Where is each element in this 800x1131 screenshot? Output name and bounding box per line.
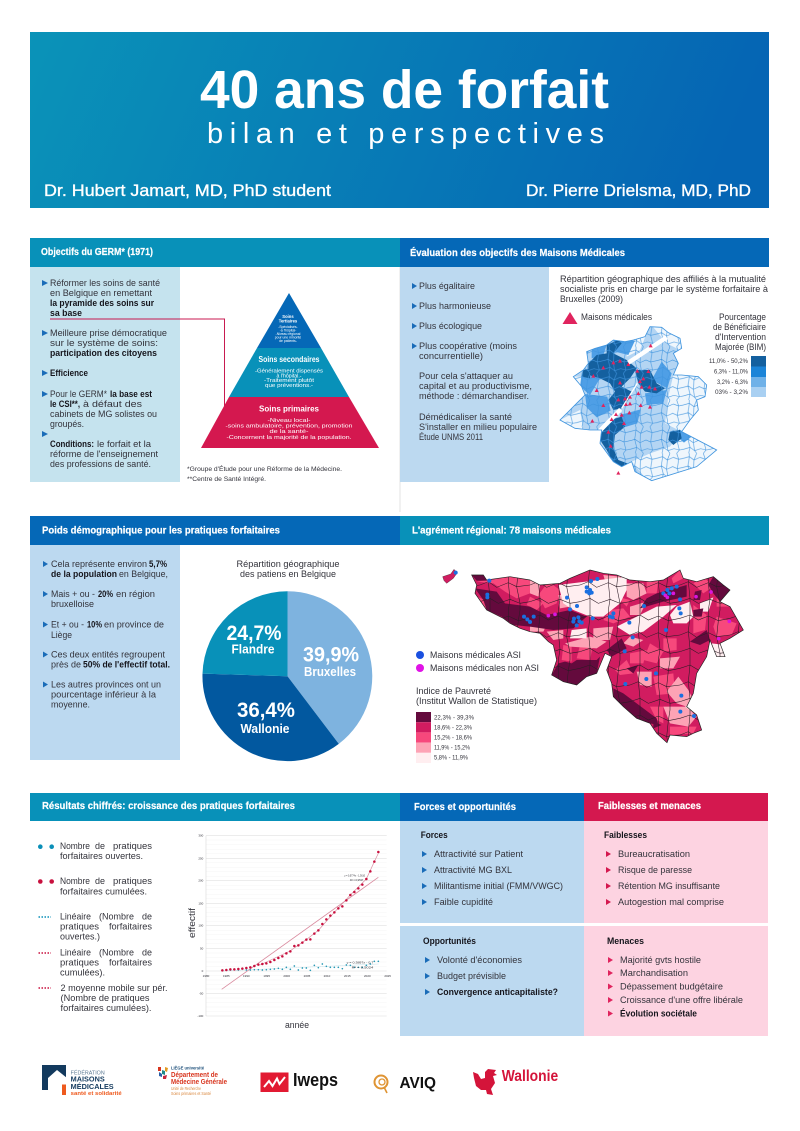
logo: Département de Médecine Générale: Médecine Générale <box>171 1079 227 1086</box>
heading: résultats <box>30 793 400 821</box>
évaluation text block: S'installer en milieu populaire <box>419 422 537 432</box>
legend: BIM percentage: Pourcentage <box>719 312 766 322</box>
legend: poverty index: 18,6% - 22,3% <box>434 724 472 732</box>
chart legend: pratiques <box>60 922 100 932</box>
panel: agrément régional <box>400 516 769 763</box>
pyramid of care: Tertiaires <box>279 318 298 324</box>
logo: Département de Médecine Générale: LIÈGE université <box>171 1064 204 1071</box>
legend: poverty index: (Institut Wallon de Statistique) <box>416 696 537 706</box>
objectifs text block: Efficience <box>50 368 88 378</box>
footnotes <box>187 464 342 483</box>
démographie text block: pourcentage inférieur à la <box>51 690 156 700</box>
block: faiblesses: Rétention MG insuffisante <box>618 881 720 891</box>
pie chart <box>202 591 372 761</box>
démographie text block: 50% de l'effectif total. <box>83 660 170 670</box>
series: open practices <box>230 961 378 970</box>
chart legend: forfaitaires <box>109 958 152 968</box>
chart legend: forfaitaires <box>109 922 152 932</box>
chart legend: ouvertes.) <box>60 932 100 942</box>
objectifs text block: la base est <box>110 389 152 399</box>
heading: évaluation <box>400 238 769 267</box>
line chart: growth: 1995 <box>263 974 270 978</box>
Brussels map caption: Répartition géographique des affiliés à la mutualité <box>560 274 766 284</box>
objectifs text block: la pyramide des soins sur <box>50 298 154 308</box>
évaluation text block: Pour cela s'attaquer au <box>419 371 513 381</box>
démographie text block: Mais + ou - <box>51 589 95 599</box>
objectifs text block: groupés. <box>50 419 84 429</box>
logo: Département de Médecine Générale: Département de <box>171 1072 218 1079</box>
Brussels map caption: socialiste pris en charge par le système forfaitaire à <box>560 284 768 294</box>
chart legend: pratiques <box>113 841 153 851</box>
logo: Wallonie <box>473 1068 558 1095</box>
panel: forces et opportunités <box>400 793 584 1036</box>
pyramid of care: -soins ambulatoire, prévention, promotion <box>226 424 352 430</box>
pie chart: 36,4% <box>237 699 295 722</box>
démographie text block: Les autres provinces ont un <box>51 680 161 690</box>
heading: poids démographique <box>30 516 400 545</box>
pyramid of care: -Concernent la majorité de la population. <box>226 435 352 441</box>
legend: non ASI: Maisons médicales non ASI <box>430 663 539 673</box>
header banner <box>30 32 769 208</box>
pyramid of care: -Généralement dispensés <box>255 368 324 374</box>
pyramid of care: -Niveau local- <box>268 418 311 424</box>
démographie text block: en Belgique, <box>119 569 168 579</box>
pyramid of care <box>201 293 379 448</box>
panel: évaluation des objectifs <box>400 238 769 487</box>
chart legend: de <box>142 948 152 958</box>
legend: poverty index <box>416 686 537 763</box>
objectifs text block: le forfait et la <box>97 439 151 449</box>
démographie text block: Ces deux entités regroupent <box>51 650 165 660</box>
block: menaces <box>584 926 768 1036</box>
map: Wallonia poverty index <box>443 560 750 747</box>
line chart: growth: 200 <box>198 879 204 883</box>
legend: BIM percentage: 3,2% - 6,3% <box>717 379 748 386</box>
block: faiblesses: Faiblesses <box>604 830 647 840</box>
legend: maisons médicales <box>562 312 652 324</box>
logo: Fédération Maisons Médicales: santé et solidarité <box>71 1091 122 1097</box>
legend: poverty index: 22,3% - 39,3% <box>434 714 474 722</box>
line chart: growth: y = 0,3897x - 0,7 <box>347 961 374 965</box>
block: opportunités <box>400 926 584 1036</box>
legend: ASI: Maisons médicales ASI <box>430 650 521 660</box>
objectifs text block: à défaut des <box>83 399 143 409</box>
block: forces: Attractivité MG BXL <box>434 865 512 875</box>
démographie text block: en région <box>116 589 155 599</box>
objectifs text block: cabinets de MG solistes ou <box>50 409 157 419</box>
chart legend: cumulées). <box>60 968 105 978</box>
évaluation text block <box>400 267 549 482</box>
line chart: growth: 2015 <box>344 974 351 978</box>
pyramid of care: de la santé- <box>270 429 309 435</box>
heading: forces et opportunités <box>400 793 584 821</box>
objectifs text block: le CSI**, <box>50 399 80 409</box>
logo: Fédération Maisons Médicales: FÉDÉRATION <box>71 1070 105 1076</box>
line chart: growth: 2005 <box>304 974 311 978</box>
pyramid of care: pour une minorité <box>275 336 301 340</box>
logo: Fédération Maisons Médicales <box>42 1065 122 1097</box>
évaluation text block: méthode : démarchandiser. <box>419 391 529 401</box>
block: opportunités: Convergence anticapitaliste? <box>437 987 558 997</box>
legend: BIM percentage: 6,3% - 11,0% <box>714 368 748 376</box>
pie chart title: Répartition géographique <box>236 559 340 569</box>
block: opportunités: Opportunités <box>423 936 476 946</box>
legend: BIM percentage: de Bénéficiaire <box>713 322 766 332</box>
pyramid of care: Soins <box>282 314 294 319</box>
heading: agrément: L'agrément régional: 78 maisons médicales <box>412 526 611 536</box>
line chart: growth: 250 <box>198 856 204 860</box>
logo: AVIQ: AVIQ <box>400 1075 436 1092</box>
objectifs text block: réforme de l'enseignement <box>50 449 159 459</box>
chart legend: de <box>95 876 105 886</box>
logo: Fédération Maisons Médicales: MAISONS <box>71 1076 105 1084</box>
chart legend: Linéaire <box>60 948 91 958</box>
block: faiblesses: Bureaucratisation <box>618 849 690 859</box>
démographie text block: Liège <box>51 630 72 640</box>
logo: Fédération Maisons Médicales: MÉDICALES <box>71 1082 114 1091</box>
pyramid of care: que préventions.- <box>265 383 313 389</box>
démographie text block: 20% <box>98 589 113 599</box>
pyramid of care: -à l'hôpital- <box>280 328 296 332</box>
objectifs text block: participation des citoyens <box>50 348 157 358</box>
block: menaces: Évolution sociétale <box>620 1008 697 1018</box>
block: faiblesses: Risque de paresse <box>618 865 692 875</box>
évaluation text block: Plus égalitaire <box>419 281 475 291</box>
chart legend: pratiques <box>113 876 153 886</box>
heading: faiblesses et menaces <box>584 793 768 821</box>
évaluation text block: Démédicaliser la santé <box>419 412 512 422</box>
évaluation text block: Étude UNMS 2011 <box>419 432 483 442</box>
objectifs text block: Pour le GERM* <box>50 389 107 399</box>
pyramid of care: -Niveau régional <box>276 332 301 336</box>
Brussels map caption: Bruxelles (2009) <box>560 294 623 304</box>
démographie text block: près de <box>51 660 81 670</box>
heading: agrément <box>400 516 769 545</box>
panel: faiblesses et menaces <box>584 793 768 1036</box>
footnotes: *Groupe d'Étude pour une Réforme de la Médecine. <box>187 464 342 473</box>
chart legend: Linéaire <box>60 912 91 922</box>
line chart: growth: 100 <box>198 924 204 928</box>
block: forces <box>400 821 584 923</box>
démographie text block: de la population <box>51 569 117 579</box>
line chart: growth: R² = 0,5024 <box>352 965 374 969</box>
author right: Dr. Pierre Drielsma, MD, PhD <box>526 181 751 200</box>
heading: évaluation: Évaluation des objectifs des Maisons Médicales <box>410 246 625 259</box>
legend: poverty index: 15,2% - 18,6% <box>434 734 472 742</box>
évaluation text block: concurrentielle) <box>419 351 483 361</box>
Brussels map caption <box>560 274 768 304</box>
démographie text block: 5,7% <box>149 559 167 569</box>
line chart: growth: 0 <box>202 969 204 973</box>
legend: BIM percentage: 11,0% - 50,2% <box>709 358 748 365</box>
chart legend: pratiques <box>60 958 100 968</box>
line chart: growth: 1985 <box>223 974 230 978</box>
block: opportunités: Budget prévisible <box>437 971 506 981</box>
chart legend: (Nombre <box>99 948 134 958</box>
line chart: growth: 50 <box>200 946 204 950</box>
block: menaces: Marchandisation <box>620 968 688 978</box>
heading: objectifs <box>30 238 400 267</box>
pyramid of care: -Spécialisés- <box>278 325 298 329</box>
démographie text block: moyenne. <box>51 700 90 710</box>
démographie text block <box>30 545 180 760</box>
trend lines <box>222 877 378 989</box>
legend: poverty index: 5,8% - 11,9% <box>434 754 468 762</box>
chart legend: Nombre <box>60 876 90 886</box>
line chart: growth: 1980 <box>203 974 210 978</box>
objectifs text block: en Belgique en remettant <box>50 288 152 298</box>
chart legend: forfaitaires cumulées). <box>60 1003 152 1013</box>
panel: poids démographique <box>30 516 400 761</box>
heading: objectifs: Objectifs du GERM* (1971) <box>41 247 153 258</box>
legend: BIM percentage: Majorée (BIM) <box>715 342 766 352</box>
line chart: growth: 2025 <box>384 974 391 978</box>
author left: Dr. Hubert Jamart, MD, PhD student <box>44 181 331 200</box>
démographie text block: en province de <box>104 620 164 630</box>
chart legend: Nombre <box>60 841 90 851</box>
legend: BIM percentage: d'Intervention <box>715 332 766 342</box>
legend: BIM percentage: 03% - 3,2% <box>715 389 748 396</box>
objectifs text block: Conditions: <box>50 439 94 449</box>
map: Brussels <box>559 326 718 482</box>
heading: forces et opportunités: Forces et opportunités <box>414 802 516 813</box>
axis title: année: année <box>285 1020 309 1030</box>
chart legend: de <box>95 841 105 851</box>
pie chart title <box>236 559 340 579</box>
chart legend: (Nombre de pratiques <box>60 993 150 1003</box>
line chart: growth <box>197 834 391 1018</box>
chart legend: (Nombre <box>99 912 134 922</box>
évaluation text block: Plus coopérative (moins <box>419 341 518 351</box>
block: faiblesses: Autogestion mal comprise <box>618 897 724 907</box>
évaluation text block: Plus écologique <box>419 321 482 331</box>
objectifs text block: des professions de santé. <box>50 459 151 469</box>
chart legend: forfaitaires ouvertes. <box>60 851 143 861</box>
block: forces: Attractivité sur Patient <box>434 849 523 859</box>
pyramid of care: de patients- <box>279 339 297 343</box>
series: cumulative practices <box>222 852 378 970</box>
line chart: growth: -50 <box>199 991 204 995</box>
logo: Département de Médecine Générale <box>158 1064 227 1096</box>
line chart: growth: y = 0,5774x - 1,3610 <box>344 874 365 878</box>
pie chart: 24,7% <box>226 622 282 645</box>
pie chart: Wallonie <box>240 721 290 736</box>
logo: Département de Médecine Générale: Unité de Recherche <box>171 1086 201 1091</box>
block: menaces: Menaces <box>607 936 644 946</box>
panel: résultats chiffrés <box>30 793 400 1030</box>
objectifs text block: Meilleure prise démocratique <box>50 328 167 338</box>
logo: Wallonie: Wallonie <box>502 1068 558 1085</box>
pyramid of care: -Traitement plutôt <box>264 378 315 384</box>
block: forces: Forces <box>421 830 448 840</box>
objectifs text block: sa base <box>50 308 82 318</box>
chart legend: forfaitaires cumulées. <box>60 886 147 896</box>
pie chart: Flandre <box>232 642 274 657</box>
logo: Département de Médecine Générale: Soins primaires et Santé <box>171 1091 211 1096</box>
démographie text block: bruxelloise <box>51 599 94 609</box>
objectifs text block: Réformer les soins de santé <box>50 278 160 288</box>
block: menaces: Dépassement budgétaire <box>620 982 723 992</box>
logo: AVIQ <box>374 1075 436 1093</box>
pyramid of care: à l'hôpital.- <box>276 374 302 380</box>
line chart: growth: 2010 <box>324 974 331 978</box>
line chart: growth: 150 <box>198 901 204 905</box>
logo: Iweps <box>260 1070 338 1092</box>
évaluation text block: capital et au productivisme, <box>419 381 532 391</box>
line chart: growth: 1990 <box>243 974 250 978</box>
pie chart title: des patiens en Belgique <box>240 569 336 579</box>
line chart: growth: 2020 <box>364 974 371 978</box>
block: menaces: Majorité gvts hostile <box>620 955 701 965</box>
title: 40 ans de forfait <box>200 60 609 120</box>
legend: poverty index: 11,9% - 15,2% <box>434 744 470 752</box>
chart legend: de <box>142 912 152 922</box>
pyramid of care: Soins primaires <box>259 404 320 414</box>
pie chart: Bruxelles <box>304 664 356 679</box>
logo: Iweps: Iweps <box>293 1070 338 1090</box>
objectifs text block <box>30 267 180 482</box>
block: menaces: Croissance d'une offre libérale <box>620 995 743 1005</box>
panel: objectifs du GERM <box>30 238 400 483</box>
subtitle: bilan et perspectives <box>207 118 604 150</box>
pyramid of care: Soins secondaires <box>258 355 320 364</box>
legend: BIM percentage <box>709 312 766 397</box>
block: forces: Faible cupidité <box>434 897 493 907</box>
objectifs text block: sur le système de soins: <box>50 338 158 348</box>
line chart: growth: R² = 0,9537 <box>350 878 364 882</box>
legend: poverty index: Indice de Pauvreté <box>416 686 491 696</box>
line chart: growth: 300 <box>198 834 204 838</box>
heading: faiblesses et menaces: Faiblesses et menaces <box>598 801 701 812</box>
démographie text block: Et + ou - <box>51 620 84 630</box>
map markers: ASI centres <box>456 573 694 716</box>
chart legend <box>38 841 168 1013</box>
block: forces: Militantisme initial (FMM/VWGC) <box>434 881 563 891</box>
chart legend: 2 moyenne mobile sur pér. <box>60 983 168 993</box>
démographie text block: Cela représente environ <box>51 559 147 569</box>
block: faiblesses <box>584 821 768 923</box>
legend: maisons médicales: Maisons médicales <box>581 312 652 322</box>
line chart: growth: 2000 <box>283 974 290 978</box>
footnotes: **Centre de Santé Intégré. <box>187 476 266 483</box>
map markers: triangles <box>590 344 657 475</box>
block: opportunités: Volonté d'économies <box>437 955 523 965</box>
heading: résultats: Résultats chiffrés: croissance des pratiques forfaitaires <box>42 801 295 812</box>
line chart: growth: -100 <box>197 1014 204 1018</box>
évaluation text block: Plus harmonieuse <box>419 301 491 311</box>
heading: poids démographique: Poids démographique pour les pratiques forfaitaires <box>42 526 280 536</box>
map markers: non-ASI centres <box>548 592 729 639</box>
démographie text block: 10% <box>87 620 102 630</box>
axis title: effectif: effectif <box>187 907 197 938</box>
pie chart: 39,9% <box>303 644 359 667</box>
connector line to pyramid <box>50 319 224 407</box>
